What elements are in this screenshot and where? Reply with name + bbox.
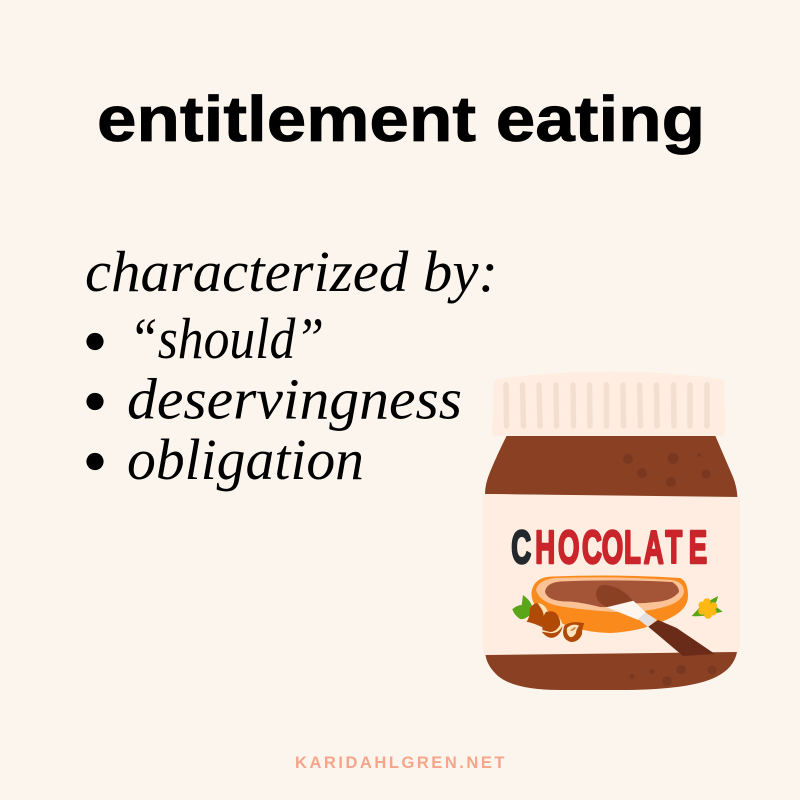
lid ribs xyxy=(506,385,707,426)
shoulder speckles xyxy=(623,453,710,487)
title: entitlement eating xyxy=(97,83,705,155)
jar base xyxy=(486,652,737,690)
base speckles xyxy=(630,665,716,686)
jar label xyxy=(482,494,740,657)
list item: obligation: obligation xyxy=(127,427,364,492)
hazelnuts xyxy=(527,603,584,642)
right leaves and flower xyxy=(692,596,723,619)
subheading: characterized by: xyxy=(85,239,498,304)
bread slice xyxy=(531,576,688,633)
icon: chocolate spread jar xyxy=(482,372,740,690)
text block: characteristics list xyxy=(85,239,498,492)
jar wordmark: HOCOLATE xyxy=(535,523,707,574)
left leaves xyxy=(512,595,532,619)
jar lid xyxy=(492,372,725,436)
knife xyxy=(607,601,715,656)
jar shoulder xyxy=(485,435,738,498)
footer url: KARIDAHLGREN.NET xyxy=(295,754,504,772)
list item: should: “should” xyxy=(129,306,324,371)
jar wordmark: C xyxy=(511,523,531,574)
list item: deservingness: deservingness xyxy=(127,366,462,432)
